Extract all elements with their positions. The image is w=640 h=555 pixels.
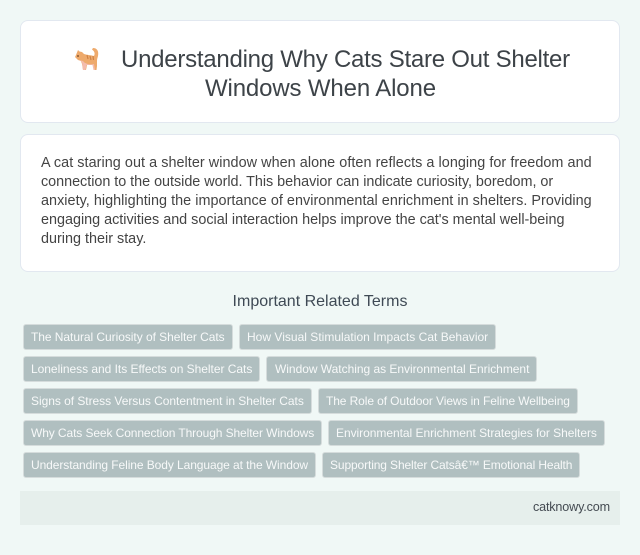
- icon: cat: [75, 48, 98, 70]
- related term tags: Environmental Enrichment Strategies for Shelters: [336, 426, 597, 440]
- related term tags: Understanding Feline Body Language at the Window: [31, 458, 308, 472]
- related term tags: Why Cats Seek Connection Through Shelter Windows: [31, 426, 314, 440]
- related term tags: The Natural Curiosity of Shelter Cats: [31, 330, 225, 344]
- footer: [20, 491, 620, 525]
- title: Understanding Why Cats Stare Out Shelter: [121, 46, 570, 73]
- summary text: anxiety, highlighting the importance of environmental enrichment in shelters. Providing: [41, 193, 592, 209]
- related term tags: Supporting Shelter Catsâ€™ Emotional Health: [330, 458, 572, 472]
- summary text: during their stay.: [41, 231, 146, 247]
- summary panel: [20, 134, 620, 272]
- related term tags: Signs of Stress Versus Contentment in Shelter Cats: [31, 394, 304, 408]
- summary text: [41, 155, 592, 247]
- header panel: [20, 20, 620, 123]
- section heading: Important Related Terms: [233, 293, 407, 310]
- site name: catknowy.com: [533, 500, 610, 514]
- related term tags: Window Watching as Environmental Enrichment: [275, 362, 529, 376]
- summary text: A cat staring out a shelter window when alone often reflects a longing for freedom and: [41, 155, 592, 171]
- summary text: connection to the outside world. This behavior can indicate curiosity, boredom, or: [41, 174, 553, 190]
- summary text: engaging activities and social interaction helps improve the cat's mental well-being: [41, 212, 564, 228]
- related term tags: Loneliness and Its Effects on Shelter Cats: [31, 362, 252, 376]
- related term tags: [23, 324, 605, 478]
- related term tags: How Visual Stimulation Impacts Cat Behavior: [247, 330, 488, 344]
- title: Windows When Alone: [205, 75, 436, 102]
- related term tags: The Role of Outdoor Views in Feline Wellbeing: [326, 394, 570, 408]
- title: [121, 46, 570, 102]
